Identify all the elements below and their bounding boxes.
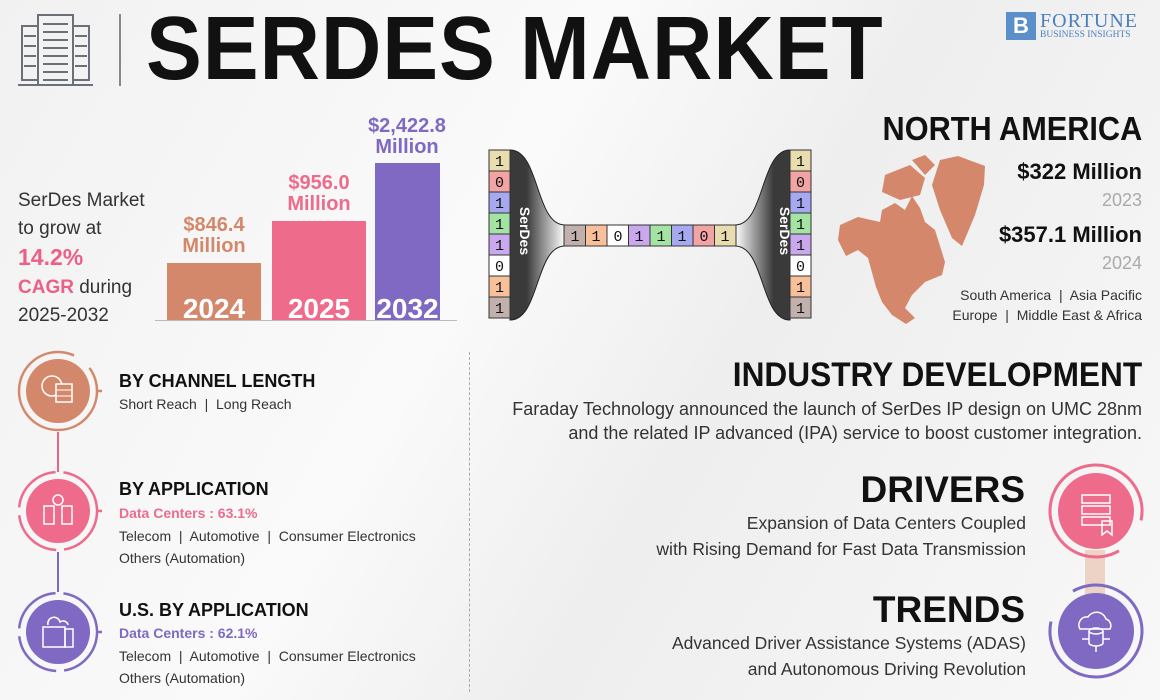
- title: SERDES MARKET: [146, 0, 884, 99]
- segment: channel length: BY CHANNEL LENGTH: [119, 371, 315, 391]
- text: industry development: and the related IP advanced (IPA) service to boost customer integration.: [568, 423, 1142, 443]
- bar chart: [155, 115, 457, 321]
- bar 2024: [167, 263, 261, 320]
- serdes diagram: 1: [570, 229, 580, 246]
- segment: application: Others (Automation): [119, 550, 245, 566]
- stat: 2023: [1017, 159, 1142, 210]
- segment: us application: U.S. BY APPLICATION: [119, 600, 309, 620]
- icon: cloud server gear: [18, 592, 102, 672]
- bar chart: $956.0: [288, 172, 350, 194]
- serdes diagram: 1: [495, 280, 504, 297]
- segment: application: BY APPLICATION: [119, 479, 269, 499]
- regions: South America | Asia Pacific: [960, 287, 1142, 303]
- text: CAGR: to grow at: [18, 218, 101, 239]
- text: industry development: Faraday Technology announced the launch of SerDes IP design on UMC 28nm: [512, 399, 1142, 419]
- heading: industry development: INDUSTRY DEVELOPMENT: [733, 356, 1142, 394]
- serdes diagram: 1: [495, 217, 504, 234]
- text: drivers: Expansion of Data Centers Coupled: [747, 513, 1026, 533]
- connector right: [1085, 550, 1105, 595]
- stat: 2024: [999, 222, 1142, 273]
- serdes diagram: [488, 150, 812, 320]
- stat: 2024: 2024: [1102, 253, 1142, 273]
- bar 2025: [272, 221, 366, 320]
- timeline connectors: [57, 432, 59, 472]
- text: drivers: with Rising Demand for Fast Data Transmission: [656, 539, 1026, 559]
- serdes diagram: 1: [796, 238, 805, 255]
- map: north america: [838, 155, 985, 324]
- serdes diagram: 0: [495, 175, 504, 192]
- icon: server rack: [18, 14, 93, 86]
- segment: channel length: [18, 350, 315, 432]
- serdes diagram: 1: [796, 154, 805, 171]
- regions: [952, 287, 1142, 323]
- serdes diagram: 0: [613, 229, 623, 246]
- serdes diagram: 1: [495, 154, 504, 171]
- segment: application: [18, 470, 416, 566]
- segment: application: Telecom | Automotive | Consumer Electronics: [119, 528, 416, 544]
- segment: application: Data Centers : 63.1%: [119, 505, 258, 521]
- serdes diagram: 0: [796, 175, 805, 192]
- serdes diagram: SerDes: [777, 207, 793, 255]
- text: CAGR: CAGR during: [18, 277, 132, 298]
- logo: B: [1013, 13, 1029, 38]
- heading: north america: NORTH AMERICA: [882, 110, 1142, 147]
- text: drivers: [656, 513, 1026, 559]
- text: CAGR: 14.2%: [18, 244, 83, 270]
- bar 2032: [375, 163, 440, 320]
- icon: globe server: [18, 350, 102, 432]
- icon: trends: [1048, 584, 1144, 678]
- serdes diagram: 1: [656, 229, 666, 246]
- bar chart: $2,422.8: [368, 115, 446, 137]
- serdes diagram: 1: [495, 196, 504, 213]
- serdes diagram: 1: [796, 301, 805, 318]
- logo: [1006, 10, 1138, 40]
- serdes diagram: SerDes: [517, 207, 533, 255]
- serdes diagram: 1: [677, 229, 687, 246]
- segment: us application: [18, 592, 416, 686]
- serdes diagram: 1: [720, 229, 730, 246]
- serdes diagram: 1: [796, 196, 805, 213]
- bar chart: Million: [375, 136, 439, 158]
- bar chart: $846.4: [183, 214, 245, 236]
- segment: us application: Telecom | Automotive | Consumer Electronics: [119, 648, 416, 664]
- text: CAGR: [18, 190, 145, 326]
- icon: drivers: [1048, 464, 1144, 558]
- text: CAGR: 2025-2032: [18, 305, 109, 326]
- segment: channel length: Short Reach | Long Reach: [119, 396, 292, 412]
- text: trends: Advanced Driver Assistance Systems (ADAS): [672, 633, 1026, 653]
- serdes diagram: 1: [495, 301, 504, 318]
- bar chart: Million: [287, 193, 351, 215]
- serdes diagram: 1: [634, 229, 644, 246]
- serdes diagram: 1: [495, 238, 504, 255]
- regions: Europe | Middle East & Africa: [952, 307, 1142, 323]
- serdes diagram: 0: [796, 259, 805, 276]
- text: industry development: [512, 399, 1142, 443]
- serdes diagram: 1: [591, 229, 601, 246]
- logo: FORTUNE: [1040, 10, 1138, 32]
- stat: 2024: $357.1 Million: [999, 222, 1142, 247]
- serdes diagram: 1: [796, 217, 805, 234]
- stat: 2023: 2023: [1102, 190, 1142, 210]
- bar chart: Million: [182, 235, 246, 257]
- heading: trends: TRENDS: [873, 589, 1025, 630]
- segment: us application: Data Centers : 62.1%: [119, 625, 258, 641]
- stat: 2023: $322 Million: [1017, 159, 1142, 184]
- heading: drivers: DRIVERS: [861, 469, 1025, 510]
- text: trends: [672, 633, 1026, 679]
- text: CAGR: SerDes Market: [18, 190, 145, 211]
- logo: BUSINESS INSIGHTS: [1040, 30, 1131, 40]
- segment: us application: Others (Automation): [119, 670, 245, 686]
- serdes diagram: 0: [699, 229, 709, 246]
- serdes diagram: 0: [495, 259, 504, 276]
- serdes diagram: 1: [796, 280, 805, 297]
- text: trends: and Autonomous Driving Revolution: [748, 659, 1026, 679]
- icon: servers cloud: [18, 470, 102, 552]
